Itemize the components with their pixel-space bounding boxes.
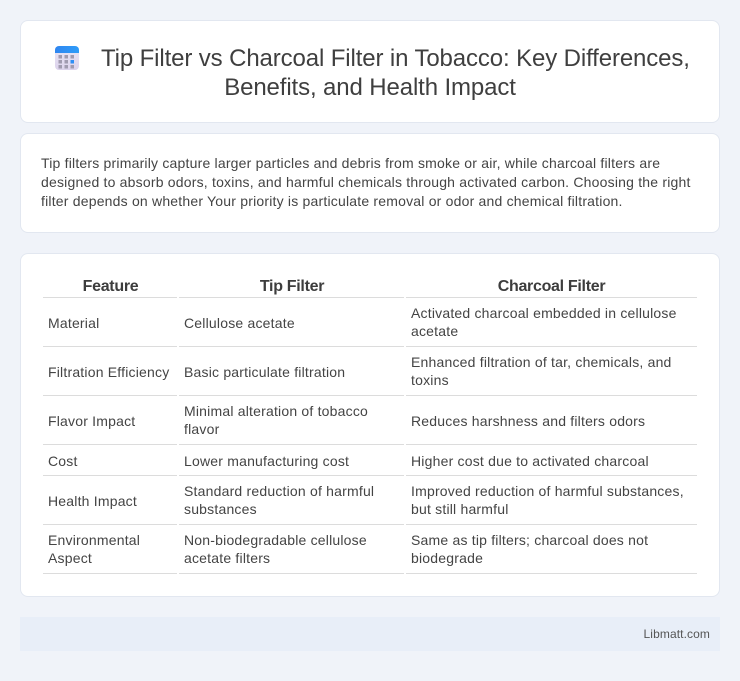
row: health impact: substances: [184, 501, 257, 517]
row: filtration efficiency: Filtration Efficiency: [48, 364, 169, 380]
title: [101, 45, 690, 101]
row: cost: Higher cost due to activated charcoal: [411, 453, 649, 469]
row: material: Activated charcoal embedded in cellulose: [411, 305, 677, 321]
footer bar: [20, 617, 720, 651]
row: filtration efficiency: [48, 354, 672, 388]
row: cost: Cost: [48, 453, 78, 469]
row: health impact: but still harmful: [411, 501, 509, 517]
intro text: Tip filters primarily capture larger particles and debris from smoke or air, while charcoal filters are: [41, 155, 660, 171]
row: filtration efficiency: Basic particulate filtration: [184, 364, 345, 380]
row: material: [48, 305, 677, 339]
row: health impact: Improved reduction of harmful substances,: [411, 483, 684, 499]
row: health impact: Health Impact: [48, 493, 137, 509]
title: Tip Filter vs Charcoal Filter in Tobacco: Key Differences,: [101, 45, 690, 72]
row: environmental aspect: Non-biodegradable cellulose: [184, 532, 367, 548]
row: filtration efficiency: Enhanced filtration of tar, chemicals, and: [411, 354, 672, 370]
row: material: acetate: [411, 323, 458, 339]
row: environmental aspect: Environmental: [48, 532, 140, 548]
table header: Feature: [83, 278, 138, 295]
table header: [83, 278, 606, 295]
row: material: Material: [48, 315, 99, 331]
row: environmental aspect: Same as tip filters; charcoal does not: [411, 532, 648, 548]
row: cost: Lower manufacturing cost: [184, 453, 349, 469]
comparison table: [43, 278, 697, 574]
row: environmental aspect: biodegrade: [411, 550, 483, 566]
row: flavor impact: Reduces harshness and filters odors: [411, 413, 645, 429]
title: Benefits, and Health Impact: [224, 74, 516, 101]
row: material: Cellulose acetate: [184, 315, 295, 331]
row: health impact: Standard reduction of harmful: [184, 483, 374, 499]
header card: [20, 20, 720, 123]
row: filtration efficiency: toxins: [411, 372, 449, 388]
row: flavor impact: flavor: [184, 421, 219, 437]
row: environmental aspect: acetate filters: [184, 550, 270, 566]
intro text: [41, 155, 691, 209]
row: health impact: [48, 483, 684, 517]
row: environmental aspect: [48, 532, 648, 566]
table header: Charcoal Filter: [498, 278, 605, 295]
row: cost: [48, 453, 649, 469]
table card: [20, 253, 720, 597]
icon: calendar: [55, 46, 79, 70]
footer credit: Libmatt.com: [644, 627, 710, 641]
intro text: filter depends on whether Your priority is particulate removal or odor and chemical filtration.: [41, 193, 623, 209]
row: environmental aspect: Aspect: [48, 550, 92, 566]
row: flavor impact: [48, 403, 645, 437]
row: flavor impact: Minimal alteration of tobacco: [184, 403, 368, 419]
intro text: designed to absorb odors, toxins, and harmful chemicals through activated carbon. Choosing the right: [41, 174, 691, 190]
table header: Tip Filter: [260, 278, 324, 295]
row: flavor impact: Flavor Impact: [48, 413, 135, 429]
intro card: [20, 133, 720, 233]
